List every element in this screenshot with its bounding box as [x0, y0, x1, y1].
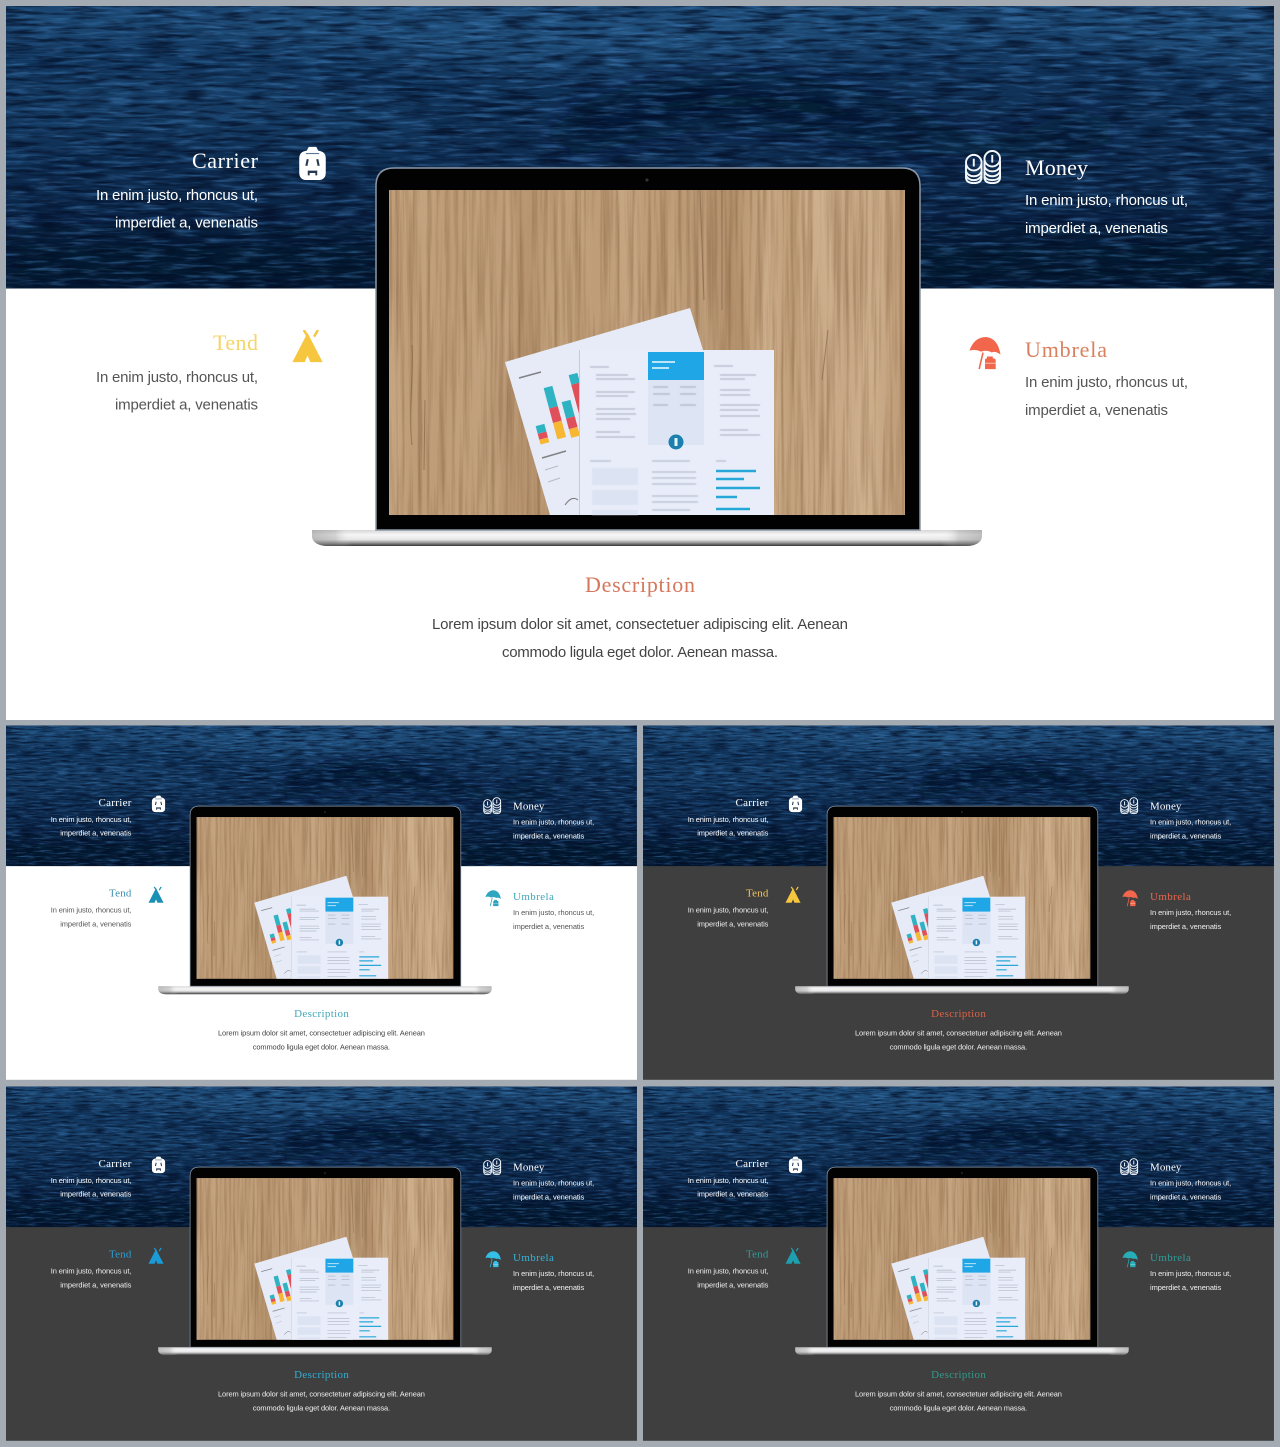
small slide: white with teal accents	[6, 726, 637, 1080]
block: Carrier: In enim justo, rhoncus ut,	[688, 1176, 768, 1185]
block: Umbrela	[513, 1252, 594, 1292]
block: Umbrela	[1025, 337, 1188, 419]
laptop with resume photo	[795, 1167, 1129, 1355]
block: Money: Money	[1150, 1162, 1182, 1174]
icon: money coins	[484, 798, 501, 814]
block: Description: Lorem ipsum dolor sit amet, consectetuer adipiscing elit. Aenean	[855, 1029, 1062, 1038]
block: Money: imperdiet a, venenatis	[1150, 1192, 1221, 1201]
icon: tent	[149, 1248, 164, 1264]
block: Money: In enim justo, rhoncus ut,	[513, 1179, 594, 1188]
block: Carrier: Carrier	[99, 1158, 132, 1170]
water photo band	[6, 6, 1274, 289]
block: Description: Description	[585, 572, 695, 597]
block: Tend: imperdiet a, venenatis	[60, 1280, 132, 1289]
block: Money	[1150, 801, 1231, 840]
icon: carrier bag	[152, 1157, 165, 1173]
water photo band	[6, 726, 637, 866]
block: Money	[1150, 1162, 1231, 1201]
icon: umbrella	[969, 337, 1001, 369]
block: Money: Money	[1150, 801, 1182, 813]
slide background	[643, 1087, 1274, 1441]
block: Tend: Tend	[109, 1249, 132, 1261]
water photo band	[6, 1086, 637, 1227]
block: Description: commodo ligula eget dolor. Aenean massa.	[253, 1042, 390, 1051]
block: Description: Lorem ipsum dolor sit amet, consectetuer adipiscing elit. Aenean	[218, 1390, 425, 1399]
icon: tent	[292, 330, 323, 362]
icon: tent	[786, 887, 801, 903]
block: Description: Description	[931, 1369, 986, 1381]
icon: money coins	[1121, 798, 1138, 814]
icon: money coins	[484, 1159, 501, 1175]
block: Description: commodo ligula eget dolor. Aenean massa.	[890, 1042, 1027, 1051]
laptop with resume photo	[795, 806, 1129, 994]
block: Description: Lorem ipsum dolor sit amet, consectetuer adipiscing elit. Aenean	[855, 1390, 1062, 1399]
laptop with resume photo	[158, 806, 492, 994]
block: Description	[218, 1008, 425, 1051]
icon: carrier bag	[789, 1157, 802, 1173]
icon: carrier bag	[789, 796, 802, 812]
block: Umbrela: imperdiet a, venenatis	[513, 922, 584, 931]
icon: money coins	[1121, 1159, 1138, 1175]
water photo band	[643, 726, 1274, 866]
block: Umbrela: imperdiet a, venenatis	[513, 1283, 584, 1292]
block: Description: commodo ligula eget dolor. Aenean massa.	[253, 1403, 390, 1412]
icon: carrier bag	[152, 796, 165, 812]
block: Carrier: In enim justo, rhoncus ut,	[51, 815, 131, 824]
block: Tend: In enim justo, rhoncus ut,	[51, 1267, 131, 1276]
block: Description: Description	[294, 1008, 349, 1020]
block: Carrier	[688, 1158, 769, 1199]
block: Carrier	[51, 1158, 132, 1199]
block: Carrier: imperdiet a, venenatis	[697, 1190, 769, 1199]
block: Money: imperdiet a, venenatis	[1025, 220, 1168, 237]
block: Description: commodo ligula eget dolor. Aenean massa.	[890, 1403, 1027, 1412]
block: Tend: Tend	[746, 1249, 769, 1261]
water photo band	[643, 1086, 1274, 1227]
block: Umbrela: In enim justo, rhoncus ut,	[1150, 908, 1231, 917]
block: Tend	[96, 330, 258, 414]
block: Tend: In enim justo, rhoncus ut,	[688, 1267, 768, 1276]
block: Umbrela: imperdiet a, venenatis	[1150, 922, 1221, 931]
block: Carrier: Carrier	[736, 1158, 769, 1170]
block: Tend: Tend	[109, 888, 132, 900]
block: Description: Description	[294, 1369, 349, 1381]
block: Description	[855, 1369, 1062, 1412]
block: Money	[1025, 155, 1188, 237]
slide background	[643, 726, 1274, 1080]
block: Umbrela: Umbrela	[513, 1252, 554, 1264]
block: Money: Money	[513, 801, 545, 813]
block: Carrier: In enim justo, rhoncus ut,	[51, 1176, 131, 1185]
block: Description: Description	[931, 1008, 986, 1020]
block: Money: Money	[513, 1162, 545, 1174]
block: Tend	[51, 888, 132, 928]
block: Umbrela: imperdiet a, venenatis	[1025, 402, 1168, 419]
block: Tend: imperdiet a, venenatis	[697, 1280, 769, 1289]
slide background	[6, 726, 637, 1080]
block: Umbrela: In enim justo, rhoncus ut,	[1025, 374, 1188, 391]
block: Carrier: In enim justo, rhoncus ut,	[96, 187, 258, 204]
slide background	[6, 6, 1274, 720]
block: Umbrela: Umbrela	[513, 891, 554, 903]
block: Description: Lorem ipsum dolor sit amet, consectetuer adipiscing elit. Aenean	[432, 616, 848, 633]
small slide: dark with teal accents	[643, 1086, 1274, 1441]
block: Umbrela	[1150, 1252, 1231, 1292]
block: Tend: imperdiet a, venenatis	[60, 919, 132, 928]
block: Money: imperdiet a, venenatis	[1150, 831, 1221, 840]
small slide: dark with blue accents	[6, 1086, 637, 1441]
block: Money: In enim justo, rhoncus ut,	[1025, 192, 1188, 209]
block: Umbrela: Umbrela	[1025, 337, 1107, 362]
block: Money: Money	[1025, 155, 1088, 180]
icon: money coins	[966, 151, 1000, 183]
block: Umbrela: Umbrela	[1150, 1252, 1191, 1264]
block: Tend: Tend	[746, 888, 769, 900]
block: Umbrela	[1150, 891, 1231, 931]
block: Carrier: Carrier	[192, 148, 259, 173]
block: Description	[432, 572, 848, 661]
block: Tend: In enim justo, rhoncus ut,	[688, 906, 768, 915]
icon: umbrella	[1122, 1251, 1138, 1267]
block: Tend: imperdiet a, venenatis	[697, 919, 769, 928]
block: Description: commodo ligula eget dolor. Aenean massa.	[502, 644, 778, 661]
block: Description	[218, 1369, 425, 1412]
block: Money	[513, 801, 594, 840]
block: Carrier	[688, 797, 769, 838]
block: Money: In enim justo, rhoncus ut,	[1150, 1179, 1231, 1188]
block: Tend: In enim justo, rhoncus ut,	[96, 369, 258, 386]
block: Carrier: imperdiet a, venenatis	[115, 214, 258, 232]
block: Money: imperdiet a, venenatis	[513, 831, 584, 840]
block: Umbrela: In enim justo, rhoncus ut,	[1150, 1269, 1231, 1278]
block: Tend	[688, 888, 769, 928]
block: Carrier: In enim justo, rhoncus ut,	[688, 815, 768, 824]
block: Carrier: imperdiet a, venenatis	[60, 829, 132, 838]
block: Umbrela	[513, 891, 594, 931]
main slide: white variant	[6, 6, 1274, 720]
block: Umbrela: In enim justo, rhoncus ut,	[513, 908, 594, 917]
block: Money: In enim justo, rhoncus ut,	[513, 818, 594, 827]
block: Carrier: Carrier	[99, 797, 132, 809]
block: Carrier: imperdiet a, venenatis	[697, 829, 769, 838]
block: Description: Lorem ipsum dolor sit amet, consectetuer adipiscing elit. Aenean	[218, 1029, 425, 1038]
icon: carrier bag	[299, 147, 326, 180]
laptop with resume photo	[158, 1167, 492, 1355]
icon: tent	[149, 887, 164, 903]
block: Umbrela: Umbrela	[1150, 891, 1191, 903]
icon: umbrella	[485, 890, 501, 906]
block: Tend: In enim justo, rhoncus ut,	[51, 906, 131, 915]
block: Umbrela: In enim justo, rhoncus ut,	[513, 1269, 594, 1278]
laptop with resume photo	[312, 168, 982, 546]
block: Money: In enim justo, rhoncus ut,	[1150, 818, 1231, 827]
block: Money: imperdiet a, venenatis	[513, 1192, 584, 1201]
block: Carrier	[96, 148, 259, 232]
block: Carrier: imperdiet a, venenatis	[60, 1190, 132, 1199]
icon: umbrella	[485, 1251, 501, 1267]
block: Tend	[51, 1249, 132, 1289]
block: Tend: imperdiet a, venenatis	[115, 396, 258, 414]
block: Umbrela: imperdiet a, venenatis	[1150, 1283, 1221, 1292]
small slide: dark with yellow and coral accents	[643, 726, 1274, 1080]
icon: tent	[786, 1248, 801, 1264]
block: Description	[855, 1008, 1062, 1051]
block: Tend: Tend	[213, 330, 258, 355]
block: Carrier	[51, 797, 132, 838]
icon: umbrella	[1122, 890, 1138, 906]
slide background	[6, 1087, 637, 1441]
block: Carrier: Carrier	[736, 797, 769, 809]
block: Tend	[688, 1249, 769, 1289]
block: Money	[513, 1162, 594, 1201]
